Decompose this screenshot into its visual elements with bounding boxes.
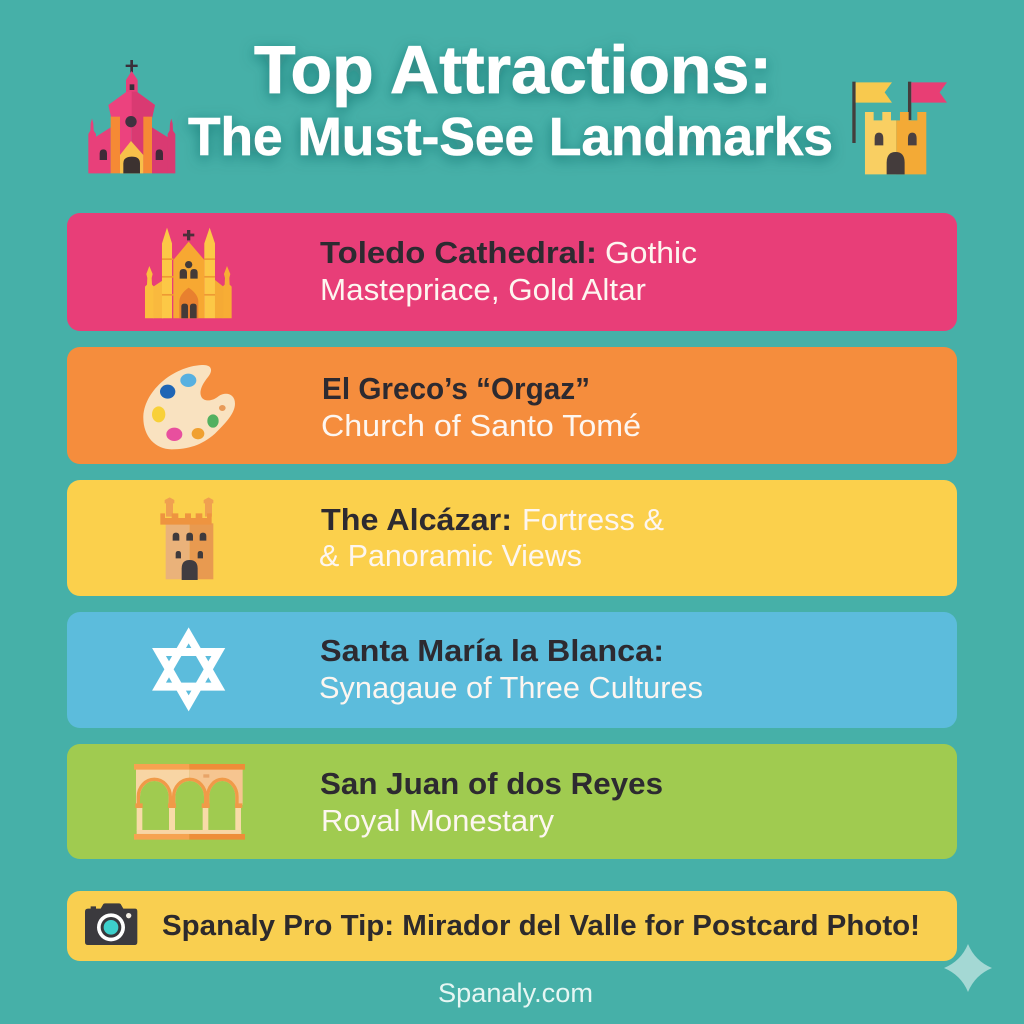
icon: paint palette: [143, 365, 235, 449]
text: El Greco: Church of Santo Tomé: [321, 408, 641, 443]
icon: gold cathedral: [145, 228, 232, 318]
text: Toledo Cathedral: [320, 235, 697, 307]
text: The Alcázar: The Alcázar:: [321, 502, 512, 537]
callout: pro tip: [67, 891, 957, 961]
panel: San Juan de los Reyes: [67, 744, 957, 859]
text: San Juan of dos Reyes: Royal Monestary: [321, 803, 554, 838]
text: Toledo Cathedral: Gothic: [605, 235, 697, 270]
text: Toledo Cathedral: Toledo Cathedral:: [320, 235, 597, 270]
title: [188, 32, 833, 167]
text: The Alcázar: & Panoramic Views: [319, 538, 582, 573]
text: Santa María la Blanca: Synagaue of Three Cultures: [319, 670, 703, 705]
icon: tower: [160, 497, 213, 580]
title: The Must-See Landmarks: [188, 107, 833, 167]
text: El Greco: El Greco’s “Orgaz”: [322, 371, 590, 406]
text: The Alcázar: [319, 502, 664, 573]
text: Toledo Cathedral: Mastepriace, Gold Altar: [320, 272, 646, 307]
text: The Alcázar: Fortress &: [522, 502, 664, 537]
footer: website: Spanaly.com: [438, 978, 593, 1008]
icon: castle with flags: [852, 82, 947, 174]
icon: pink church: [88, 60, 175, 173]
text: El Greco: [321, 371, 641, 443]
panel: El Greco: [67, 347, 957, 464]
icon: camera: [85, 903, 137, 945]
text: pro tip: Spanaly Pro Tip: Mirador del Valle for Postcard Photo!: [162, 910, 920, 942]
text: San Juan of dos Reyes: [320, 766, 663, 838]
icon: sparkle: [944, 944, 992, 992]
text: San Juan of dos Reyes: San Juan of dos Reyes: [320, 766, 663, 801]
panel: Santa María la Blanca: [67, 612, 957, 728]
panel: The Alcázar: [67, 480, 957, 596]
icon: arcade: [134, 764, 245, 840]
panel: Toledo Cathedral: [67, 213, 957, 331]
icon: star of David: [159, 635, 218, 703]
text: Santa María la Blanca: Santa María la Blanca:: [320, 633, 664, 668]
text: Santa María la Blanca: [319, 633, 703, 705]
title: Top Attractions:: [254, 32, 772, 108]
